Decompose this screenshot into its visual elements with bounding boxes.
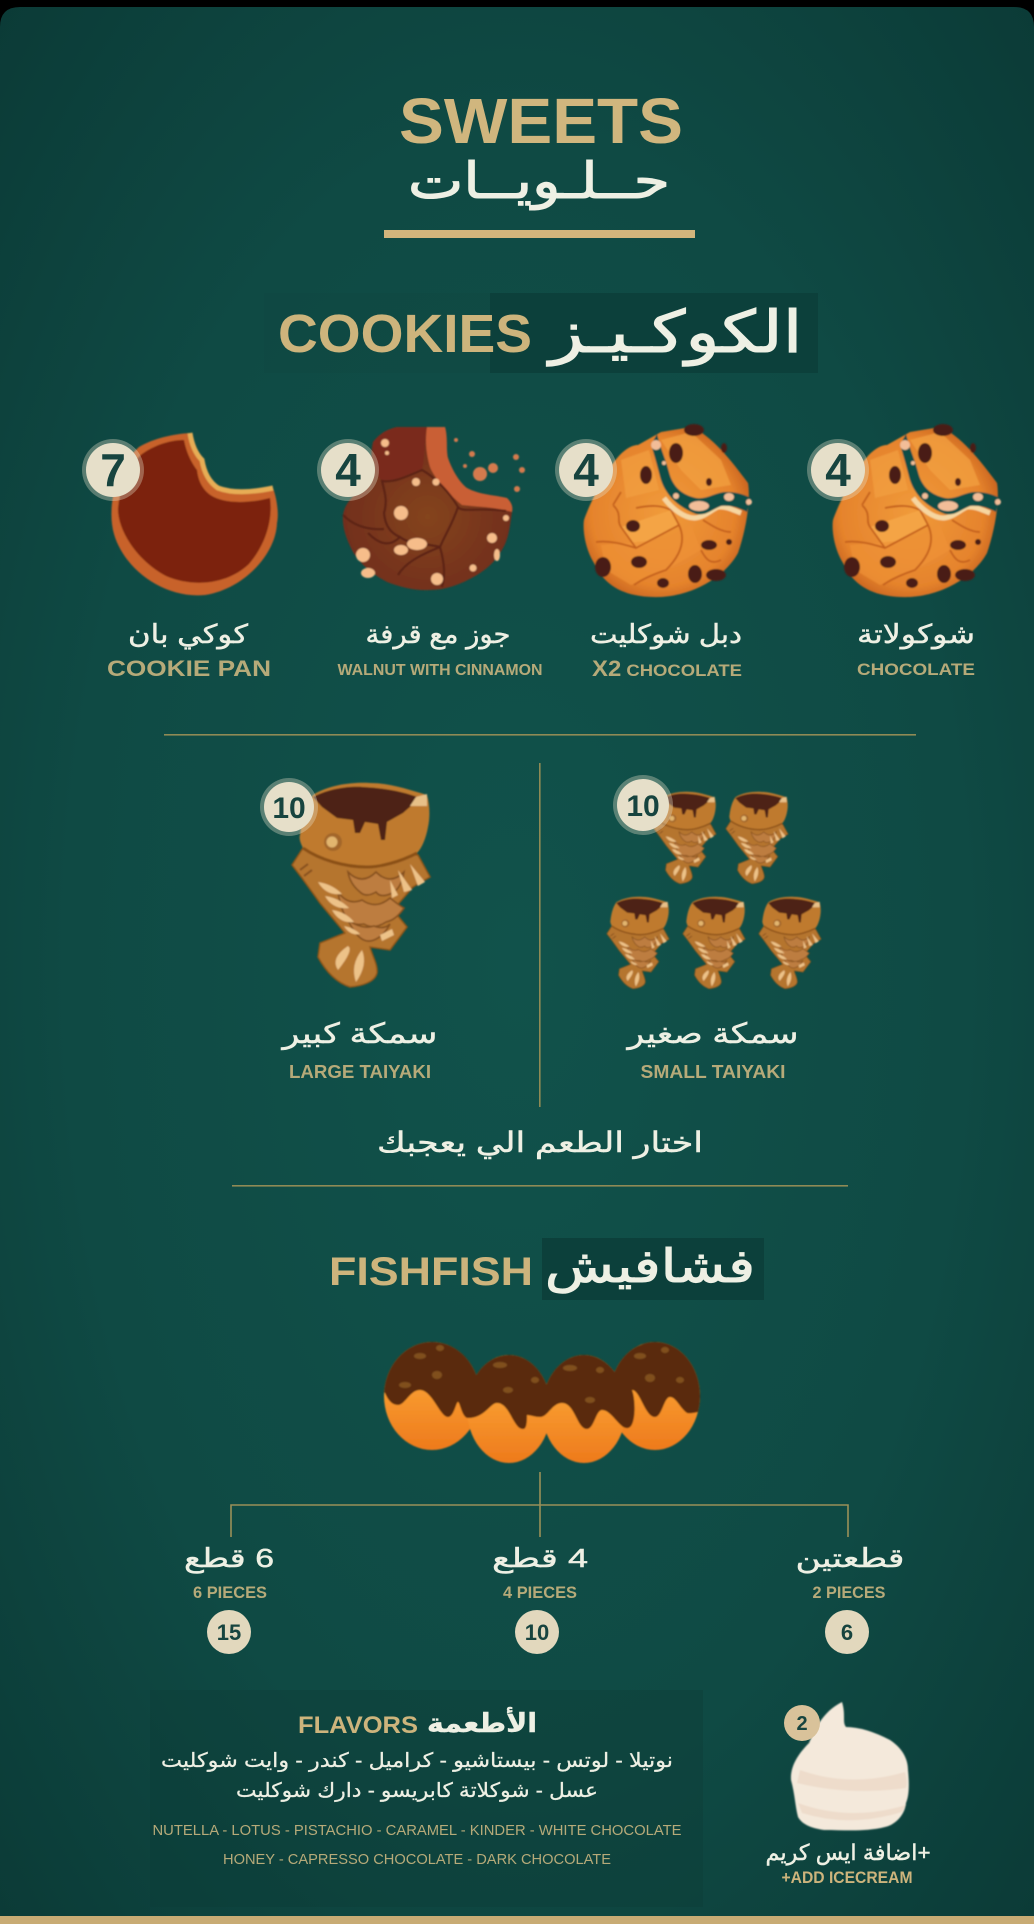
english label: 6 PIECES [193,1583,267,1602]
note: choose flavor: اختار الطعم الي يعجبك [377,1127,703,1159]
item: double chocolate cookie [555,424,752,681]
price badge 2: 2 [796,1713,808,1735]
flavors heading: الأطعمة [427,1707,537,1738]
icon: double chocolate cookie [584,424,752,597]
icon: small taiyaki group [607,792,821,989]
arabic flavors list [161,1750,673,1802]
heading: cookies: COOKIES [278,304,532,364]
arabic label: سمكة كبير [280,1018,438,1050]
price badge 4: 4 [573,444,599,496]
price badge 4 [555,439,617,501]
price badge 4 [807,439,869,501]
icon: large taiyaki [292,783,430,987]
heading: fishfish: فشافيش [545,1240,755,1293]
english label: X2 CHOCOLATE [592,656,742,681]
english label: +ADD ICECREAM [782,1868,912,1887]
item: walnut cookie [317,427,542,679]
icon: cookie pan [111,433,278,595]
price badge 4: 4 [825,444,851,496]
arabic flavors list: عسل - شوكلاتة كابريسو - دارك شوكليت [236,1780,598,1802]
english label: 4 PIECES [503,1583,577,1602]
heading: fishfish [329,1238,764,1300]
price badge 10: 10 [272,792,306,825]
option: 2 pieces [796,1543,904,1654]
english flavors list: NUTELLA - LOTUS - PISTACHIO - CARAMEL - KINDER - WHITE CHOCOLATE [152,1822,682,1839]
price badge 2 [784,1705,820,1741]
arabic label: دبل شوكليت [590,619,742,650]
english label: 2 PIECES [812,1583,886,1602]
connector lines [231,1472,848,1537]
price badge 10: 10 [626,790,660,823]
price badge 7 [82,439,144,501]
english label: WALNUT WITH CINNAMON [338,662,542,679]
title: sweets [384,85,695,238]
title: sweets: SWEETS [399,85,683,157]
english label: COOKIE PAN [107,656,271,681]
icon: fishfish balls [383,1341,701,1464]
english label: LARGE TAIYAKI [289,1062,431,1082]
item: chocolate cookie [807,424,1001,679]
price badge 7: 7 [100,444,126,496]
english label: CHOCOLATE [857,660,975,679]
english flavors list [152,1822,682,1868]
arabic label: قطعتين [796,1543,904,1574]
title: sweets: حــلـويــات [408,153,670,210]
arabic label: 6 قطع [184,1543,274,1574]
english flavors list: HONEY - CAPRESSO CHOCOLATE - DARK CHOCOLATE [223,1851,611,1868]
heading: cookies: الكوكـيـز [546,300,802,367]
arabic label: جوز مع قرفة [366,619,510,650]
flavors heading [298,1707,537,1739]
heading: cookies [264,293,818,373]
arabic label: 4 قطع [492,1543,588,1574]
item: cookie pan [82,433,278,681]
arabic label: سمكة صغير [625,1018,798,1050]
option: 6 pieces [184,1543,274,1654]
price badge 15: 15 [217,1620,241,1645]
arabic label: +اضافة ايس كريم [766,1840,930,1866]
item: add ice cream [766,1702,930,1887]
panel: flavors [150,1690,703,1907]
option: 4 pieces [492,1543,588,1654]
arabic label: شوكولاتة [857,619,975,650]
icon: ice cream [791,1702,909,1830]
arabic flavors list: نوتيلا - لوتس - بيستاشيو - كراميل - كندر - وايت شوكليت [161,1750,673,1772]
icon: chocolate cookie [833,424,1001,597]
price badge 6: 6 [841,1620,853,1645]
price badge 4 [317,439,379,501]
arabic label: كوكي بان [128,619,249,650]
price badge 10: 10 [525,1620,549,1645]
price badge 4: 4 [335,444,361,496]
flavors heading: FLAVORS [298,1712,418,1739]
heading: fishfish: FISHFISH [329,1250,533,1294]
item: small taiyaki [607,775,821,1082]
price badge 10 [613,775,673,835]
icon: walnut cookie [343,427,525,590]
price badge 10 [260,778,318,836]
english label: SMALL TAIYAKI [640,1062,786,1082]
item: large taiyaki [260,778,438,1082]
